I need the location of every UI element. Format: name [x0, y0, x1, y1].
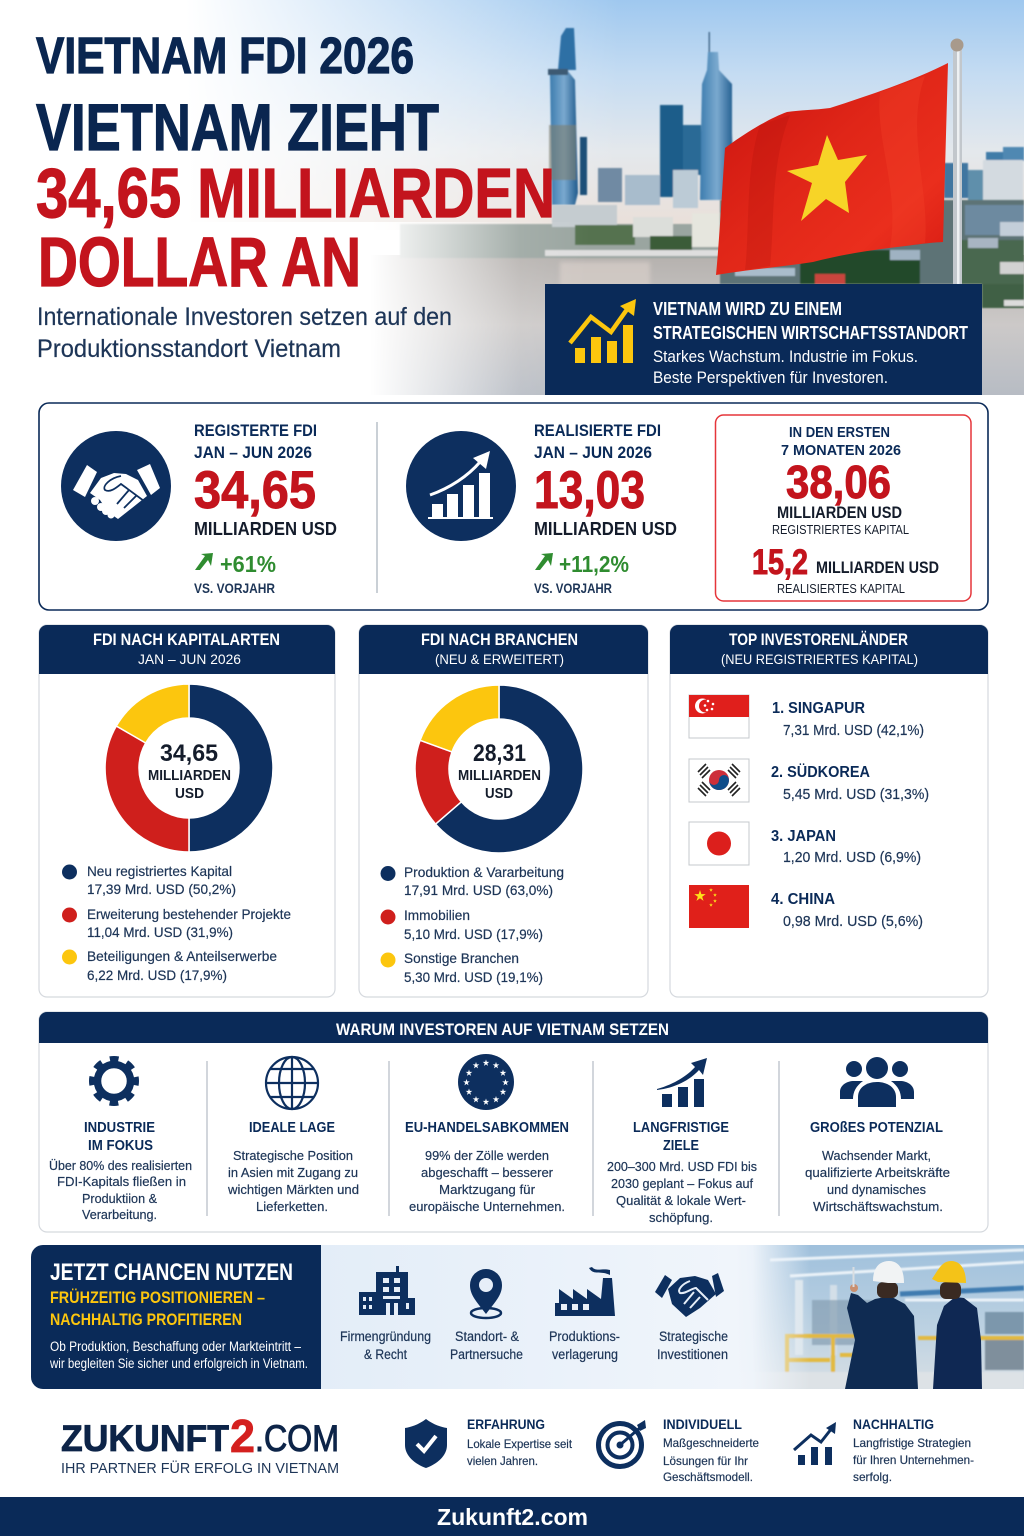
column: EU trade agreement: 99% der Zölle werden [425, 1148, 549, 1163]
kpi: registered FDI [194, 422, 337, 596]
column: industry: Produktiion & [82, 1191, 157, 1206]
legend: Erweiterung bestehender Projekte [87, 906, 291, 922]
left white fade [0, 222, 531, 395]
column: EU trade agreement: europäische Unternehmen. [409, 1199, 565, 1214]
feature: individual [663, 1417, 759, 1484]
callout text: Beste Perspektiven für Investoren. [653, 369, 888, 387]
icon: gear [92, 1060, 136, 1102]
legend: 5,30 Mrd. USD (19,1%) [404, 969, 543, 985]
column: EU trade agreement: abgeschafft – besserer [421, 1165, 554, 1180]
kpi: realized FDI: +11,2% [559, 551, 629, 577]
label: company formation: & Recht [364, 1347, 407, 1362]
callout text: Starkes Wachstum. Industrie im Fokus. [653, 348, 918, 366]
panel header: TOP INVESTORENLÄNDER [729, 631, 908, 649]
title block: VIETNAM ZIEHT [36, 90, 439, 164]
column: location: Strategische Position [233, 1148, 353, 1163]
feature: sustainable: serfolg. [853, 1470, 892, 1484]
column: long-term goals [607, 1120, 757, 1225]
legend: Neu registriertes Kapital [87, 863, 232, 879]
label: strategic investments: Investitionen [657, 1347, 728, 1362]
skyline buildings [548, 28, 1024, 208]
column: long-term goals: LANGFRISTIGE [633, 1120, 729, 1136]
man with white helmet [845, 1261, 918, 1389]
donut chart [415, 685, 583, 853]
CTA navy box: FRÜHZEITIG POSITIONIEREN – [50, 1288, 265, 1307]
label: company formation: Firmengründung [340, 1329, 431, 1344]
column: industry [49, 1120, 192, 1222]
footer bar [0, 1497, 1024, 1536]
kpi: realized FDI [534, 422, 677, 596]
flag pole [950, 38, 964, 286]
subtitle: Produktionsstandort Vietnam [37, 335, 341, 363]
legend: Sonstige Branchen [404, 950, 519, 966]
feature: sustainable: Langfristige Strategien [853, 1436, 971, 1450]
panel header: FDI NACH KAPITALARTEN [93, 631, 280, 649]
donut chart [105, 684, 273, 852]
kpi: registered FDI: +61% [220, 551, 276, 577]
title block: VIETNAM FDI 2026 [36, 27, 414, 84]
callout: first seven months: IN DEN ERSTEN [789, 424, 890, 441]
label: location and partners [450, 1329, 523, 1362]
feature: sustainable [853, 1417, 974, 1484]
country: South Korea: 5,45 Mrd. USD (31,3%) [783, 786, 929, 803]
logo: Zukunft2.com: ZUKUNFT [61, 1418, 229, 1459]
callout: first seven months [716, 415, 971, 601]
column: location: IDEALE LAGE [249, 1120, 335, 1136]
panel header: FDI NACH BRANCHEN [421, 631, 578, 649]
flag: South Korea [689, 759, 749, 802]
title block: 34,65 MILLIARDEN [36, 154, 555, 232]
callout text [653, 299, 968, 387]
feature: experience [467, 1417, 573, 1468]
panel header: WARUM INVESTOREN AUF VIETNAM SETZEN [336, 1021, 669, 1039]
flag: Japan [689, 822, 749, 865]
label: relocation [549, 1329, 620, 1362]
country: Singapore [772, 700, 924, 739]
kpi: realized FDI: JAN – JUN 2026 [534, 444, 652, 462]
icon: sustainable growth [794, 1422, 836, 1465]
country: Japan: 3. JAPAN [771, 828, 836, 845]
photo: managers in factory [735, 1245, 1024, 1389]
country: Japan [771, 828, 921, 866]
legend: Immobilien [404, 907, 470, 923]
man with yellow helmet [932, 1261, 982, 1389]
country: China: 4. CHINA [771, 891, 835, 908]
panel header: (NEU REGISTRIERTES KAPITAL) [721, 651, 918, 667]
donut chart: USD [175, 786, 204, 802]
panel: top investor countries [670, 625, 988, 997]
legend: 11,04 Mrd. USD (31,9%) [87, 924, 233, 940]
icon: location pin [470, 1269, 502, 1318]
feature: sustainable: NACHHALTIG [853, 1417, 934, 1432]
riverside city and greenery [400, 200, 1024, 308]
label: company formation [340, 1329, 431, 1362]
panel header [39, 1012, 988, 1043]
CTA navy box: wir begleiten Sie sicher und erfolgreich in Vietnam. [49, 1356, 308, 1371]
callout: first seven months: MILLIARDEN USD [777, 504, 902, 522]
logo: Zukunft2.com: 2 [230, 1410, 255, 1462]
country: Singapore: 7,31 Mrd. USD (42,1%) [783, 722, 924, 739]
icon: growth chart [570, 299, 636, 363]
column: potential: Wirtschäftswachstum. [813, 1199, 943, 1214]
donut chart: 28,31 [473, 740, 526, 767]
donut chart: USD [485, 786, 513, 802]
country: South Korea: 2. SÜDKOREA [771, 762, 870, 781]
callout: first seven months: 15,2 [752, 543, 808, 582]
panel: why investors choose Vietnam [39, 1012, 988, 1232]
callout: first seven months: 38,06 [786, 456, 891, 508]
legend: 5,10 Mrd. USD (17,9%) [404, 926, 543, 942]
kpi: registered FDI: VS. VORJAHR [194, 580, 275, 596]
kpi: realized FDI: REALISIERTE FDI [534, 422, 661, 440]
legend: 17,91 Mrd. USD (63,0%) [404, 882, 553, 898]
country: China [771, 891, 923, 930]
logo: Zukunft2.com [61, 1410, 339, 1477]
column: EU trade agreement [405, 1120, 569, 1214]
panel header: JAN – JUN 2026 [138, 651, 241, 667]
column: EU trade agreement: Marktzugang für [439, 1182, 536, 1197]
country: Singapore: 1. SINGAPUR [772, 700, 865, 717]
CTA navy box: Ob Produktion, Beschaffung oder Markteintritt – [50, 1339, 301, 1354]
subtitle: Internationale Investoren setzen auf den [37, 303, 452, 331]
column: potential: Wachsender Markt, [822, 1148, 931, 1163]
CTA navy box: JETZT CHANCEN NUTZEN [50, 1259, 293, 1286]
column: potential: GROßES POTENZIAL [810, 1120, 943, 1136]
donut chart: MILLIARDEN [148, 768, 231, 784]
icon: buildings [359, 1266, 415, 1315]
feature: individual: Lösungen für Ihr [663, 1454, 748, 1468]
feature: individual: Maßgeschneiderte [663, 1436, 759, 1450]
callout text: VIETNAM WIRD ZU EINEM [653, 299, 842, 319]
column: location: wichtigen Märkten und [227, 1182, 359, 1197]
icon: handshake in circle [61, 431, 171, 541]
column: potential: und dynamisches [827, 1182, 926, 1197]
feature: experience: Lokale Expertise seit [467, 1437, 573, 1451]
label: strategic investments [657, 1329, 728, 1362]
country: South Korea [771, 762, 929, 803]
panel: call to action services [31, 1245, 1024, 1389]
icon: people [840, 1057, 914, 1107]
feature: experience: ERFAHRUNG [467, 1417, 545, 1432]
panel: key figures [39, 403, 988, 610]
CTA navy box: NACHHALTIG PROFITIEREN [50, 1310, 242, 1329]
column: long-term goals: schöpfung. [649, 1210, 713, 1225]
donut chart: 34,65 [160, 740, 218, 767]
icon: factory [555, 1267, 615, 1316]
CTA navy box [31, 1245, 321, 1389]
callout: first seven months: MILLIARDEN USD [816, 559, 939, 577]
title block: DOLLAR AN [38, 223, 361, 301]
flag: China [689, 885, 749, 928]
kpi: registered FDI: REGISTERTE FDI [194, 422, 317, 440]
icon: EU stars [458, 1054, 514, 1110]
hero photo: skyline, river and flag [223, 0, 1024, 395]
column: location: Lieferketten. [256, 1199, 328, 1214]
column: long-term goals: 2030 geplant – Fokus auf [611, 1176, 753, 1191]
column: industry: INDUSTRIE [84, 1120, 155, 1136]
label: location and partners: Partnersuche [450, 1347, 523, 1362]
icon: handshake [655, 1273, 724, 1317]
logo: Zukunft2.com: .COM [255, 1418, 339, 1459]
column: long-term goals: Qualität & lokale Wert- [616, 1193, 746, 1208]
kpi: realized FDI: VS. VORJAHR [534, 580, 612, 596]
legend [380, 864, 564, 985]
column: long-term goals: ZIELE [663, 1138, 699, 1154]
country: China: 0,98 Mrd. USD (5,6%) [783, 913, 923, 930]
column: location: in Asien mit Zugang zu [228, 1165, 358, 1180]
column: industry: FDI-Kapitals fließen in [57, 1174, 186, 1189]
column: industry: Verarbeitung. [82, 1207, 157, 1222]
icon: rising chart in circle [406, 431, 516, 541]
panel: FDI by capital type [39, 625, 335, 997]
legend: 17,39 Mrd. USD (50,2%) [87, 881, 236, 897]
label: relocation: Produktions- [549, 1329, 620, 1344]
legend: 6,22 Mrd. USD (17,9%) [87, 967, 227, 983]
kpi: registered FDI: MILLIARDEN USD [194, 519, 337, 539]
Vietnam flag [716, 63, 948, 275]
legend [62, 863, 291, 983]
column: industry: IM FOKUS [88, 1138, 153, 1154]
panel: FDI by sector [359, 625, 648, 997]
label: strategic investments: Strategische [659, 1329, 728, 1344]
callout: first seven months: 7 MONATEN 2026 [781, 442, 901, 459]
label: location and partners: Standort- & [455, 1329, 519, 1344]
title block [36, 27, 555, 301]
logo: Zukunft2.com: IHR PARTNER FÜR ERFOLG IN VIETNAM [61, 1459, 339, 1477]
icon: globe [266, 1057, 318, 1109]
kpi: registered FDI: JAN – JUN 2026 [194, 444, 312, 462]
column: long-term goals: 200–300 Mrd. USD FDI bis [607, 1159, 757, 1174]
callout: strategic location [545, 284, 982, 395]
donut chart: MILLIARDEN [458, 768, 541, 784]
kpi: realized FDI: 13,03 [534, 461, 645, 520]
callout: first seven months: REALISIERTES KAPITAL [777, 582, 905, 596]
kpi: registered FDI: 34,65 [194, 461, 316, 520]
column: industry: Über 80% des realisierten [49, 1158, 192, 1173]
flag: Singapore [689, 695, 749, 738]
column: potential [805, 1120, 950, 1214]
icon: target [598, 1420, 646, 1466]
footer bar: Zukunft2.com [437, 1504, 588, 1530]
feature: individual: INDIVIDUELL [663, 1417, 742, 1432]
panel header [39, 625, 335, 674]
legend: Beteiligungen & Anteilserwerbe [87, 948, 277, 964]
legend: Produktion & Vararbeitung [404, 864, 564, 880]
icon: shield [405, 1419, 447, 1468]
feature: individual: Geschäftsmodell. [663, 1470, 753, 1484]
panel header [359, 625, 648, 674]
feature: sustainable: für Ihren Unternehmen- [853, 1453, 974, 1467]
callout: first seven months: REGISTRIERTES KAPITAL [772, 523, 909, 537]
kpi: realized FDI: MILLIARDEN USD [534, 519, 677, 539]
subtitle [37, 303, 452, 363]
icon: growth bars [657, 1058, 707, 1107]
panel header: (NEU & ERWEITERT) [435, 651, 564, 667]
label: relocation: verlagerung [552, 1347, 618, 1362]
column: EU trade agreement: EU-HANDELSABKOMMEN [405, 1120, 569, 1136]
column: location [227, 1120, 359, 1214]
country: Japan: 1,20 Mrd. USD (6,9%) [783, 849, 921, 866]
feature: experience: vielen Jahren. [467, 1454, 538, 1468]
column: potential: qualifizierte Arbeitskräfte [805, 1165, 950, 1180]
panel header [670, 625, 988, 674]
